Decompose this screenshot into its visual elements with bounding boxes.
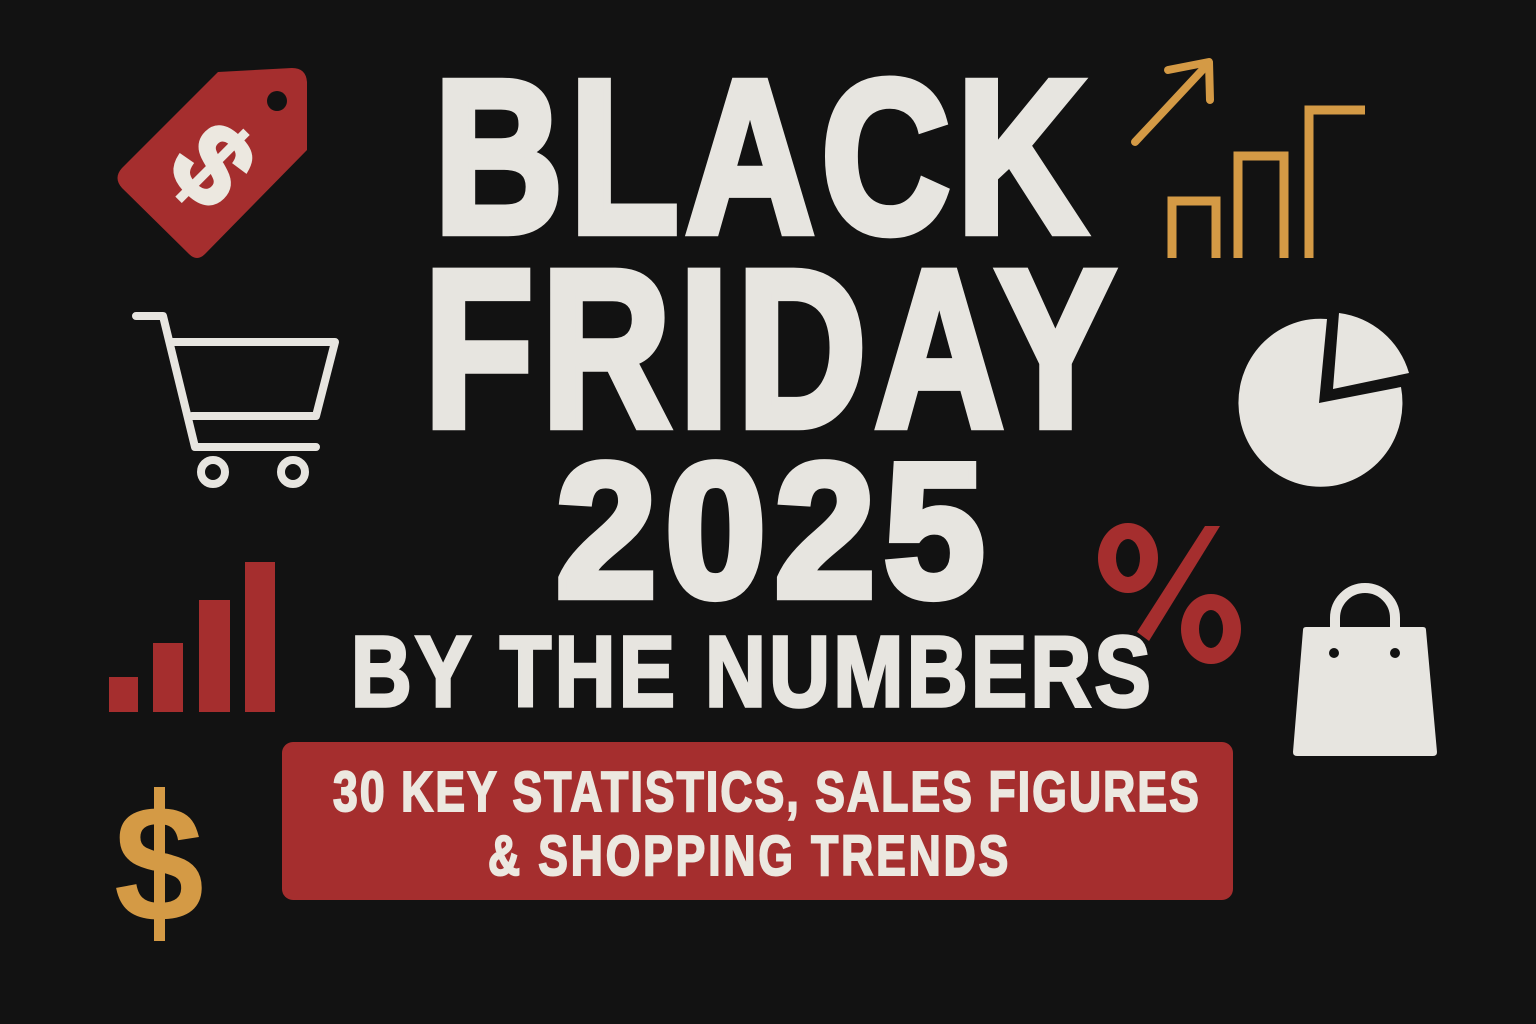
title line: Black: BLACK — [434, 36, 1086, 279]
banner: key statistics — [282, 742, 1233, 900]
banner line 2: & SHOPPING TRENDS — [488, 824, 1008, 887]
subtitle: by the numbers: BY THE NUMBERS — [351, 615, 1151, 728]
icon: gold rising arrow — [1135, 62, 1210, 142]
icon: shopping cart — [136, 316, 335, 484]
icon: shopping bag — [1293, 588, 1437, 756]
title line: Friday: FRIDAY — [424, 223, 1115, 473]
icon: price tag: $ — [145, 98, 280, 233]
icon: percent sign — [1098, 523, 1241, 664]
icon: red bar chart — [109, 562, 275, 712]
icon: pie chart — [1238, 313, 1409, 487]
banner line 1: 30 KEY STATISTICS, SALES FIGURES — [333, 760, 1199, 823]
icon: gold outlined bars — [1172, 110, 1365, 258]
icon: price tag — [118, 68, 307, 258]
title line: 2025: 2025 — [556, 425, 984, 637]
title: Black Friday 2025 — [424, 36, 1115, 637]
icon: gold dollar sign: $ — [114, 772, 204, 957]
